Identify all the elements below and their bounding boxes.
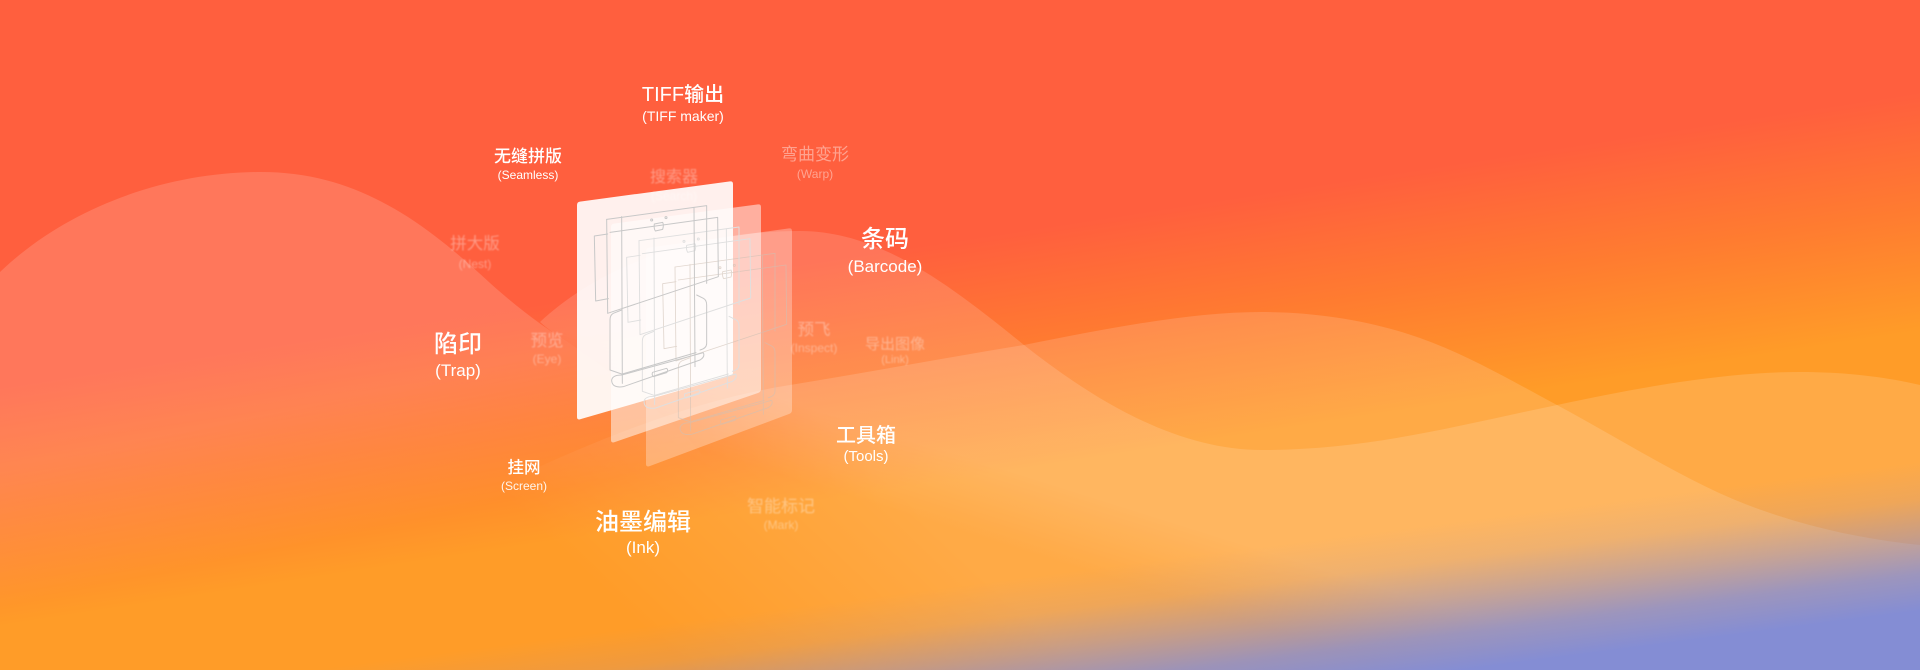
label: link (faint): [865, 336, 925, 366]
sheet 3 (back): [646, 228, 792, 466]
label: search (faint): 搜索器: [650, 169, 698, 186]
label: TIFF maker: TIFF输出: [642, 84, 724, 106]
label: ink: [595, 509, 691, 557]
label: screen: 挂网: [508, 459, 540, 477]
label: seamless: 无缝拼版: [494, 147, 562, 166]
label: screen: (Screen): [501, 479, 547, 493]
label: screen: [501, 458, 547, 493]
label: inspect (faint): (Inspect): [791, 341, 837, 355]
label: nest (faint): (Nest): [459, 257, 491, 271]
label: link (faint): (Link): [881, 354, 909, 366]
label: seamless: (Seamless): [498, 168, 558, 182]
label: inspect (faint): 预飞: [798, 321, 830, 339]
label: barcode: (Barcode): [848, 257, 922, 276]
label: mark (faint): 智能标记: [747, 497, 815, 516]
label: nest (faint): 拼大版: [450, 235, 500, 253]
label: tools: 工具箱: [836, 425, 896, 447]
sheet 1 (front): [577, 181, 733, 419]
label: ink: (Ink): [626, 538, 660, 557]
label: trap: 陷印: [434, 331, 482, 358]
label: trap: [434, 331, 482, 380]
label: TIFF maker: [642, 84, 724, 124]
label: seamless: [494, 147, 562, 182]
label: warp (faint): 弯曲变形: [781, 145, 849, 164]
label: eye (faint): 预览: [530, 332, 564, 350]
label: nest (faint): [450, 234, 500, 271]
label: ink: 油墨编辑: [595, 509, 691, 536]
label: eye (faint): [530, 332, 564, 366]
label: link (faint): 导出图像: [865, 336, 925, 353]
label: warp (faint): [781, 145, 849, 181]
sheet 2 (middle): [611, 204, 761, 442]
label: barcode: 条码: [861, 226, 909, 253]
label: inspect (faint): [790, 321, 838, 355]
label: barcode: [848, 226, 922, 276]
dielines: [594, 206, 787, 435]
label: TIFF maker: (TIFF maker): [642, 108, 724, 124]
label: tools: [836, 424, 896, 465]
label: tools: (Tools): [843, 448, 888, 465]
label: mark (faint): (Mark): [764, 518, 798, 532]
label: search (faint): [650, 168, 698, 203]
label: search (faint): (Search): [651, 189, 697, 203]
label: mark (faint): [747, 497, 815, 532]
label: trap: (Trap): [435, 361, 481, 380]
label: eye (faint): (Eye): [533, 352, 561, 366]
label: warp (faint): (Warp): [797, 167, 833, 181]
